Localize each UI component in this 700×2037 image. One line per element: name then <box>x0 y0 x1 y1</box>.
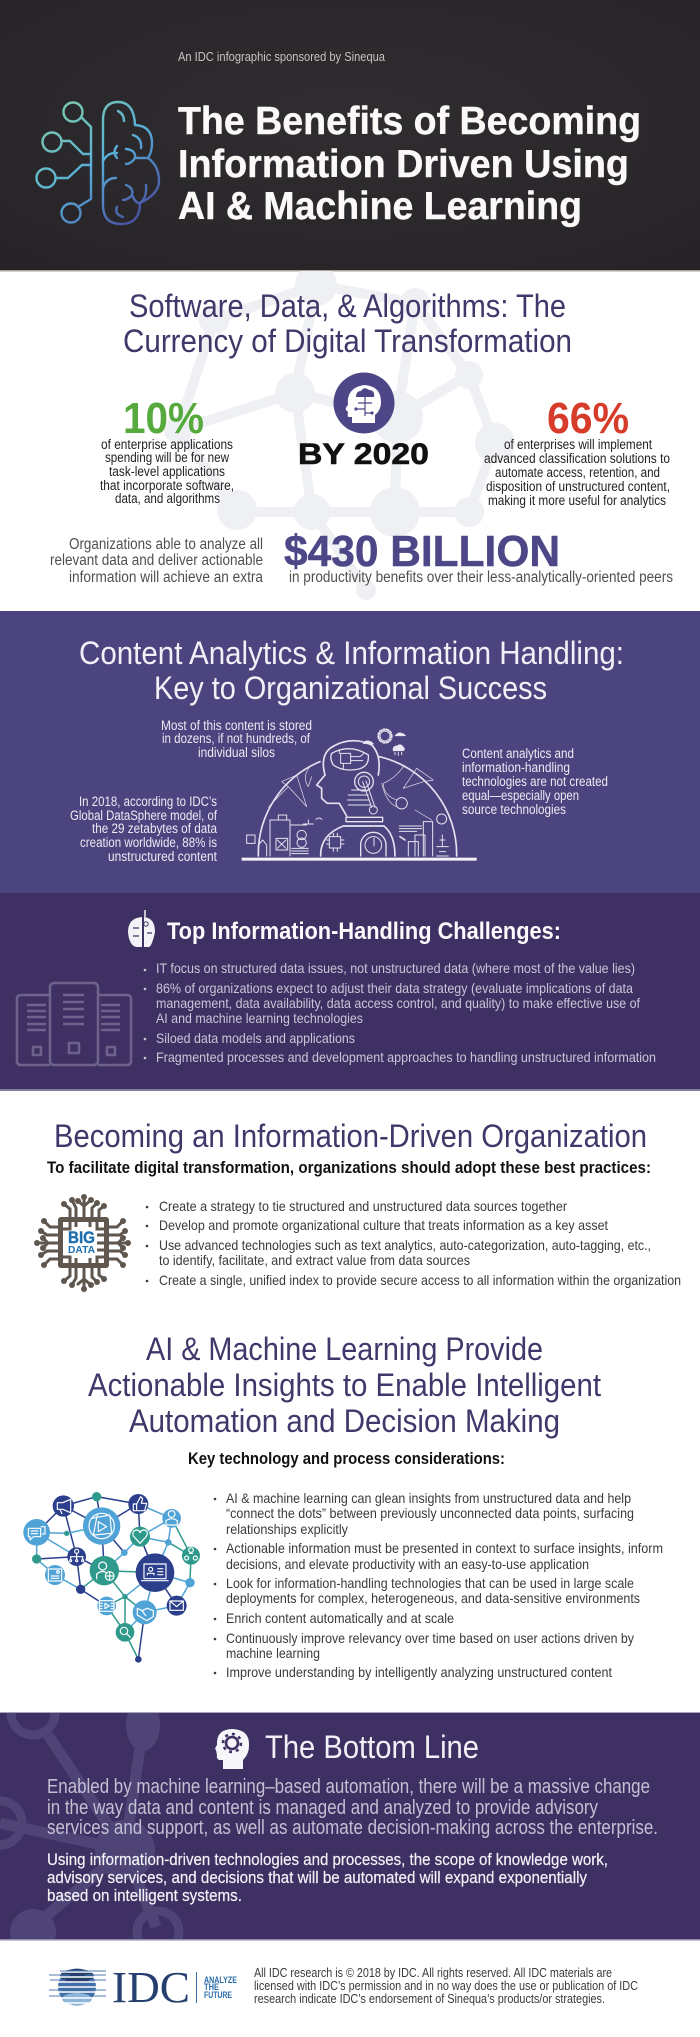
list: best practices: Create a strategy to tie structured and unstructured data sources together <box>159 1198 567 1214</box>
text: organizations able to analyze: Organizations able to analyze all <box>69 536 263 553</box>
list: best practices: to identify, facilitate, and extract value from data sources <box>159 1252 470 1268</box>
text: zetabytes: creation worldwide, 88% is <box>80 835 217 850</box>
tagline: ANALYZE <box>204 1975 237 1985</box>
heading: ai and machine learning: Actionable Insights to Enable Intelligent <box>88 1367 601 1403</box>
icon: servers <box>17 983 131 1065</box>
title: Information Driven Using <box>178 143 629 186</box>
stat: 10 percent <box>100 394 234 506</box>
illustration: robot head under dome <box>242 729 477 861</box>
panel: top information-handling challenges <box>0 893 700 1091</box>
stat: 66 percent: automate access, retention, and <box>495 465 660 480</box>
list: key considerations: Improve understanding by intelligently analyzing unstructured content <box>226 1664 612 1680</box>
text: silos: in dozens, if not hundreds, of <box>162 731 310 746</box>
heading: software: Software, Data, & Algorithms: The <box>129 288 566 324</box>
list: challenges: AI and machine learning technologies <box>156 1010 363 1026</box>
panel: the bottom line <box>0 1712 700 1940</box>
stat: 10 percent: task-level applications <box>109 464 225 479</box>
icon: head with cloud <box>334 372 394 434</box>
stat: 10 percent: 10% <box>123 394 204 443</box>
list: best practices <box>146 1198 681 1288</box>
list: key considerations <box>214 1490 663 1680</box>
text: not created equal: information-handling <box>462 760 570 775</box>
footer: copyright text: licensed with IDC’s permission and in no way does the use or publication of IDC <box>254 1979 638 1993</box>
icon: big data chip <box>34 1194 131 1292</box>
list: key considerations: deployments for complex, heterogeneous, and data-sensitive environments <box>226 1590 640 1606</box>
list: challenges: 86% of organizations expect to adjust their data strategy (evaluate implications of data <box>156 980 633 996</box>
text: zetabytes: the 29 zetabytes of data <box>92 821 217 836</box>
heading: software <box>123 288 572 359</box>
stat: 10 percent: data, and algorithms <box>115 491 220 506</box>
text: knowledge work expansion <box>47 1851 608 1905</box>
text: silos <box>161 718 312 760</box>
stat: 430 billion: $430 BILLION <box>284 527 560 576</box>
list: key considerations: Continuously improve relevancy over time based on user actions driven by <box>226 1630 634 1646</box>
text: knowledge work expansion: based on intelligent systems. <box>47 1887 242 1905</box>
tagline: FUTURE <box>204 1990 232 2000</box>
text: not created equal: technologies are not created <box>462 774 608 789</box>
subheading: key considerations: Key technology and process considerations: <box>188 1449 505 1468</box>
tagline <box>204 1975 237 2000</box>
list: key considerations: machine learning <box>226 1645 320 1661</box>
title: AI & Machine Learning <box>178 185 582 228</box>
text: organizations able to analyze: information will achieve an extra <box>69 569 263 586</box>
list: key considerations: Enrich content automatically and at scale <box>226 1610 454 1626</box>
stat: 10 percent: of enterprise applications <box>101 437 233 452</box>
heading: becoming information-driven: Becoming an Information-Driven Organization <box>54 1118 647 1154</box>
heading: ai and machine learning: AI & Machine Learning Provide <box>146 1331 543 1367</box>
footer: copyright text <box>254 1966 638 2006</box>
heading: content analytics: Key to Organizational Success <box>154 670 547 706</box>
stat: 66 percent: of enterprises will implement <box>504 437 652 452</box>
stat: 66 percent <box>484 394 670 508</box>
text: not created equal <box>462 746 608 817</box>
icon: half robot head <box>128 910 155 947</box>
icon: big data chip: BIG <box>68 1228 95 1247</box>
list: key considerations: “connect the dots” between previously unconnected data points, surfacing <box>226 1505 634 1521</box>
footer: copyright text: research indicate IDC’s endorsement of Sinequa’s products/or strategies. <box>254 1992 605 2006</box>
list: challenges <box>144 960 656 1065</box>
stat: 10 percent: spending will be for new <box>105 450 229 465</box>
stat: 10 percent: that incorporate software, <box>100 478 234 493</box>
text: zetabytes: In 2018, according to IDC’s <box>79 794 217 809</box>
title: The Benefits of Becoming <box>178 100 641 143</box>
header band <box>0 0 700 272</box>
heading: content analytics: Content Analytics & Information Handling: <box>79 635 624 671</box>
list: challenges: Siloed data models and applications <box>156 1030 355 1046</box>
list: challenges: management, data availability, data access control, and quality) to make effective use of <box>156 995 640 1011</box>
footer: idc logo <box>49 1963 237 2012</box>
text: not created equal: Content analytics and <box>462 746 574 761</box>
panel: software, data and algorithms <box>50 271 672 600</box>
heading: the bottom line: The Bottom Line <box>265 1729 479 1765</box>
heading: challenges: Top Information-Handling Challenges: <box>167 918 561 945</box>
stat: 66 percent: 66% <box>547 394 629 443</box>
background network pattern <box>164 264 515 600</box>
list: key considerations: decisions, and elevate productivity with an easy-to-use application <box>226 1556 589 1572</box>
footer: copyright text: All IDC research is © 2018 by IDC. All rights reserved. All IDC materials are <box>254 1966 612 1980</box>
icon: big data chip: DATA <box>68 1244 95 1256</box>
sponsor line: An IDC infographic sponsored by Sinequa <box>178 50 385 64</box>
text: knowledge work expansion: advisory services, and decisions that will be automated will expand exponentially <box>47 1869 588 1887</box>
list: key considerations: Look for information-handling technologies that can be used in large scale <box>226 1575 634 1591</box>
list: best practices: Use advanced technologies such as text analytics, auto-categorization, auto-tagging, etc., <box>159 1237 651 1253</box>
text: machine learning automation: in the way data and content is managed and analyzed to provide advisory <box>47 1797 598 1819</box>
text: zetabytes: unstructured content <box>108 849 217 864</box>
list: challenges: Fragmented processes and development approaches to handling unstructured information <box>156 1049 656 1065</box>
icon: network brain <box>23 1492 200 1663</box>
panel: content analytics <box>0 611 700 894</box>
text: organizations able to analyze: relevant data and deliver actionable <box>50 552 263 569</box>
heading: software: Currency of Digital Transformation <box>123 323 572 359</box>
text: machine learning automation <box>47 1776 658 1839</box>
list: challenges: IT focus on structured data issues, not unstructured data (where most of the value lies) <box>156 960 635 976</box>
stat: 66 percent: advanced classification solutions to <box>484 451 670 466</box>
heading: ai and machine learning: Automation and Decision Making <box>129 1403 560 1439</box>
tagline: THE <box>204 1982 219 1992</box>
title <box>178 100 641 228</box>
text: not created equal: equal—especially open <box>462 788 579 803</box>
footer: idc logo: IDC <box>112 1963 190 2012</box>
stat: 66 percent: disposition of unstructured content, <box>486 479 670 494</box>
text: silos: individual silos <box>198 745 275 760</box>
text: zetabytes: Global DataSphere model, of <box>70 808 217 823</box>
icon: striped globe <box>49 1968 106 2006</box>
text: zetabytes <box>70 794 217 864</box>
background molecule pattern <box>0 1713 184 1939</box>
by 2020: BY 2020 <box>298 438 429 471</box>
text: knowledge work expansion: Using information-driven technologies and processes, the scope of knowledge work, <box>47 1851 608 1869</box>
text: silos: Most of this content is stored <box>161 718 312 733</box>
icon: circuit brain <box>36 102 159 224</box>
list: key considerations: relationships explicitly <box>226 1521 348 1537</box>
text: not created equal: source technologies <box>462 802 566 817</box>
list: key considerations: AI & machine learning can glean insights from unstructured data and help <box>226 1490 631 1506</box>
list: best practices: Develop and promote organizational culture that treats information as a key asset <box>159 1217 608 1233</box>
heading: content analytics <box>79 635 624 706</box>
heading: ai and machine learning <box>88 1331 601 1439</box>
text: organizations able to analyze <box>50 536 263 586</box>
list: key considerations: Actionable information must be presented in context to surface insights, inform <box>226 1540 663 1556</box>
icon: head with gear <box>215 1729 249 1769</box>
stat: 66 percent: making it more useful for analytics <box>488 493 666 508</box>
